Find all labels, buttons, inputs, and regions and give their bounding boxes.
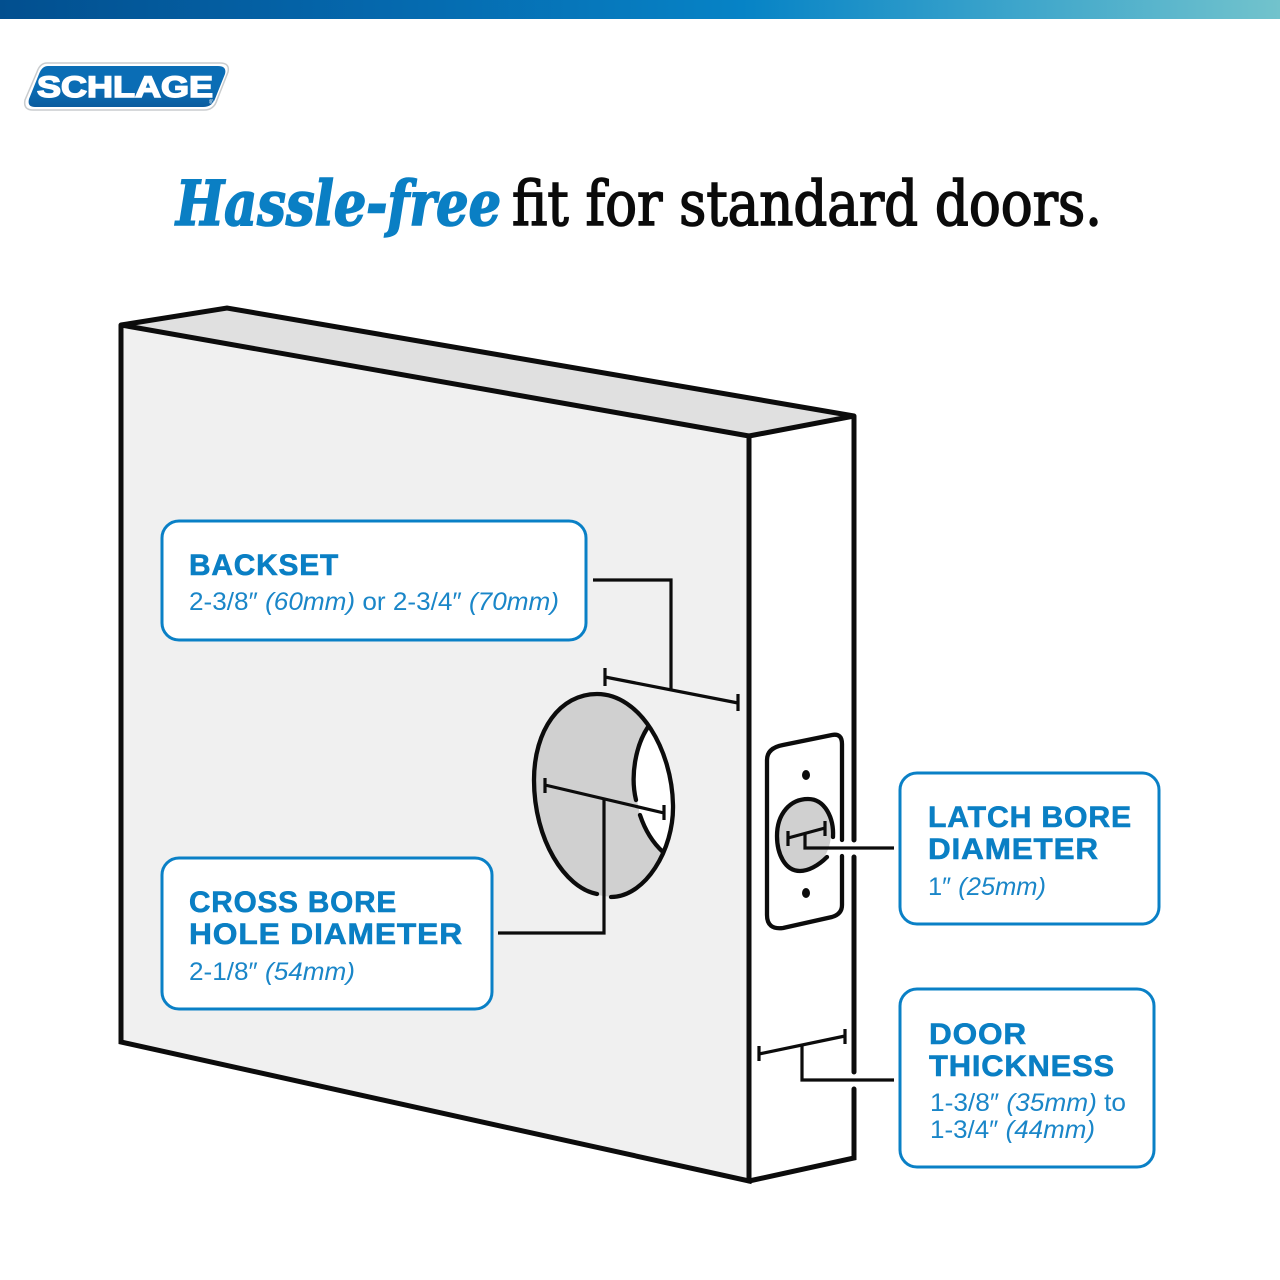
leader line — [805, 834, 894, 848]
plate screw holes — [802, 770, 810, 780]
strike plate — [767, 735, 842, 928]
door side edge — [749, 416, 854, 1181]
backset dimension — [605, 668, 738, 711]
callout: backset — [162, 521, 671, 689]
door thickness dimension — [759, 1029, 845, 1061]
callout: door thickness: 1-3/4″ (44mm) — [930, 1116, 1095, 1144]
door outline — [121, 308, 854, 1181]
door front face — [121, 325, 749, 1181]
callout: cross bore: CROSS BORE — [189, 886, 397, 919]
latch dimension — [788, 821, 825, 846]
callout: latch bore: DIAMETER — [928, 833, 1099, 866]
door top face — [121, 308, 854, 436]
top gradient bar — [0, 0, 1280, 19]
callout: backset: BACKSET — [189, 549, 339, 582]
title: fit for standard doors. — [512, 167, 1102, 240]
title — [174, 167, 1102, 240]
callout: door thickness: THICKNESS — [929, 1050, 1115, 1083]
latch bore — [772, 795, 836, 875]
title: Hassle-free — [174, 167, 501, 240]
leader line — [498, 800, 604, 933]
cross bore dimension — [545, 778, 664, 820]
callout: door thickness: DOOR — [929, 1018, 1027, 1051]
callout: latch bore — [805, 773, 1159, 924]
cross bore hole — [523, 685, 685, 905]
leader line — [802, 1045, 894, 1080]
callout: cross bore: HOLE DIAMETER — [189, 918, 463, 951]
Schlage logo: ® — [209, 99, 214, 106]
callout: cross bore — [162, 800, 604, 1009]
callout: cross bore: 2-1/8″ (54mm) — [189, 958, 355, 986]
Schlage logo — [25, 63, 228, 110]
Schlage logo: SCHLAGE — [37, 71, 213, 104]
callout: latch bore: LATCH BORE — [928, 801, 1132, 834]
callout: door thickness — [802, 989, 1154, 1167]
leader line — [593, 580, 671, 689]
callout: backset: 2-3/8″ (60mm) or 2-3/4″ (70mm) — [189, 588, 559, 616]
callout: latch bore: 1″ (25mm) — [928, 873, 1046, 901]
door illustration — [121, 308, 854, 1181]
callout: door thickness: 1-3/8″ (35mm) to — [930, 1089, 1126, 1117]
